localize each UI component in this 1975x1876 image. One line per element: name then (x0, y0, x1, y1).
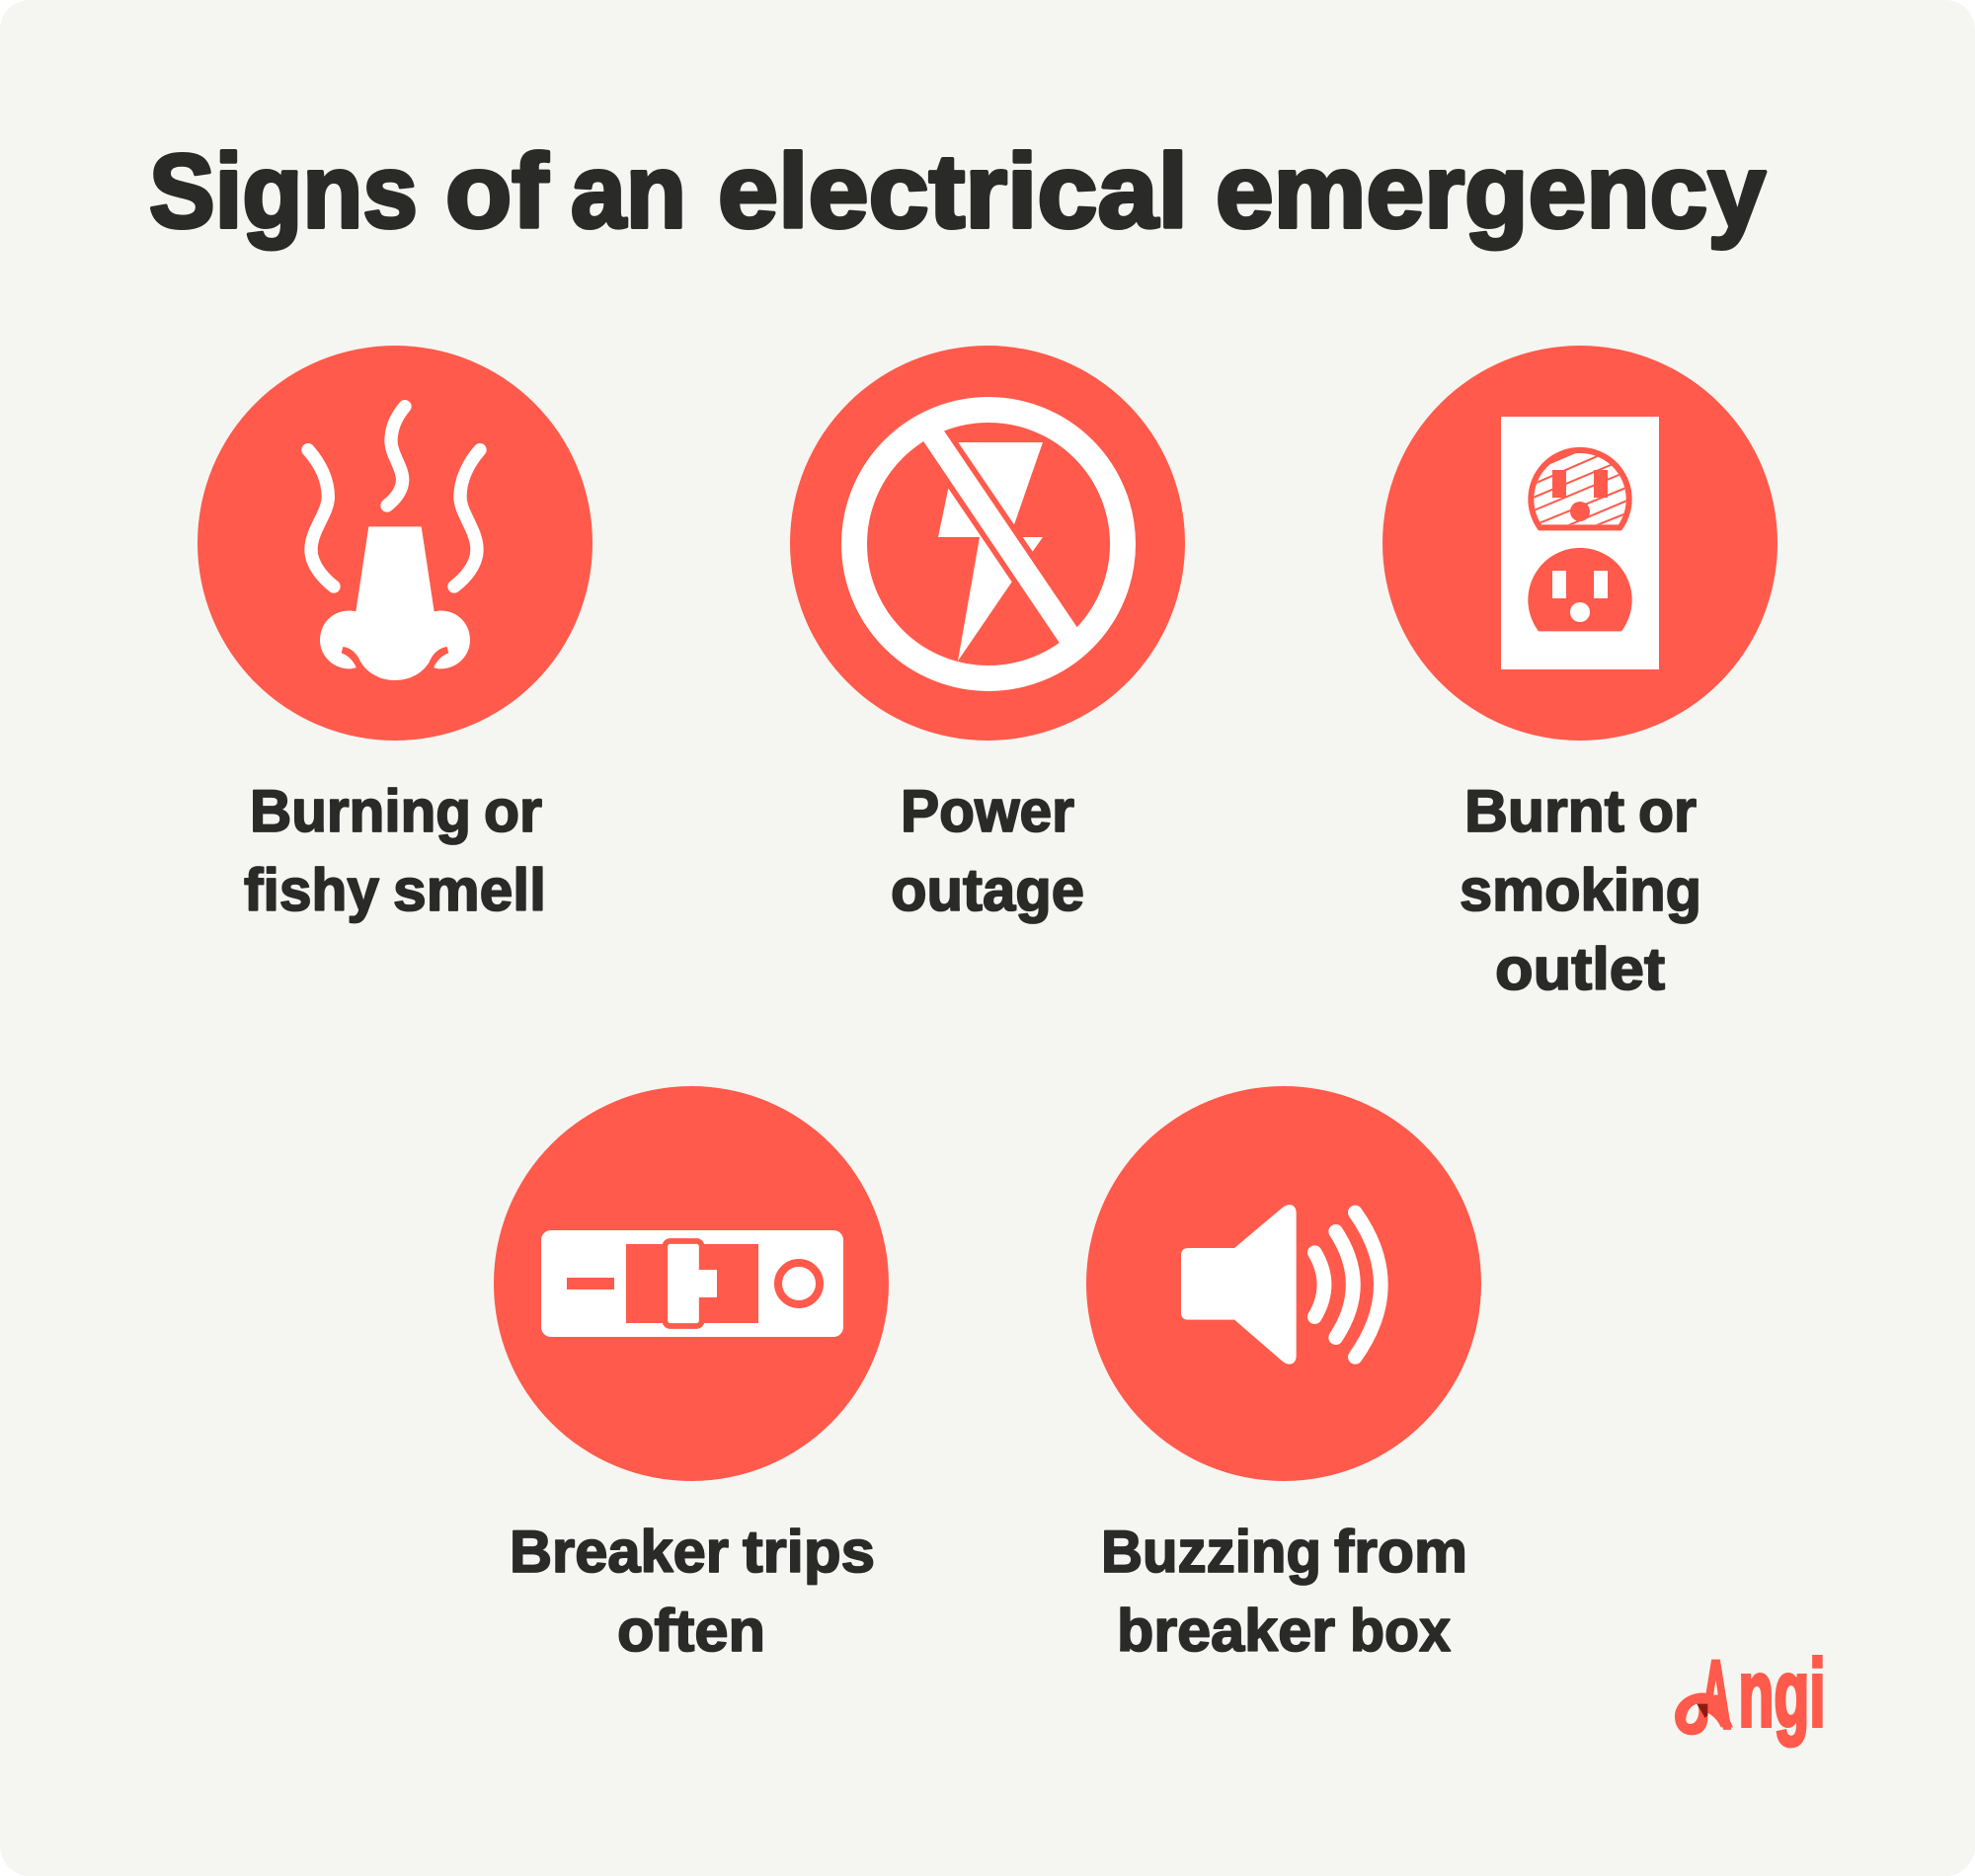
label: burning or fishy smell: smell (393, 857, 546, 923)
label: buzzing from breaker box: from (1334, 1519, 1467, 1585)
label: burning or fishy smell: fishy (244, 857, 380, 923)
label: burnt or smoking outlet: Burnt (1464, 778, 1624, 844)
label: burning or fishy smell: Burning (250, 778, 471, 844)
icon: circuit breaker switch (494, 1086, 889, 1481)
label: power outage (891, 778, 1084, 923)
label: burning or fishy smell: or (484, 778, 542, 844)
label: buzzing from breaker box: breaker (1117, 1598, 1335, 1664)
label: buzzing from breaker box (1101, 1519, 1467, 1664)
label: burnt or smoking outlet: outlet (1495, 936, 1665, 1002)
title: of (445, 133, 549, 250)
label: breaker trips often: often (617, 1598, 765, 1664)
logo: Angi (1675, 1640, 1826, 1748)
logo: Angi: ngi (1738, 1640, 1826, 1747)
icon: nose with smell wisps (198, 346, 592, 741)
panel: power outage (790, 346, 1185, 923)
label: power outage: outage (891, 857, 1084, 923)
icon: burnt wall outlet (1382, 346, 1778, 741)
label: breaker trips often: Breaker (510, 1519, 729, 1585)
label: burnt or smoking outlet: or (1638, 778, 1697, 844)
panel: buzzing from breaker box (1086, 1086, 1481, 1664)
label: buzzing from breaker box: box (1350, 1598, 1451, 1664)
label: buzzing from breaker box: Buzzing (1101, 1519, 1321, 1585)
panel: burning or fishy smell (198, 346, 592, 923)
panel: breaker trips often (494, 1086, 889, 1664)
icon: speaker with sound waves (1086, 1086, 1481, 1481)
icon: crossed-out lightning bolt (790, 346, 1185, 741)
label: burning or fishy smell (244, 778, 546, 923)
title: Signs (149, 133, 418, 250)
label: breaker trips often (510, 1519, 875, 1664)
label: burnt or smoking outlet (1460, 778, 1701, 1002)
title: emergency (1216, 133, 1766, 250)
label: burnt or smoking outlet: smoking (1460, 857, 1701, 923)
label: power outage: Power (901, 778, 1074, 844)
title (149, 133, 1766, 250)
label: breaker trips often: trips (743, 1519, 875, 1585)
title: an (571, 133, 686, 250)
title: electrical (718, 133, 1188, 250)
panel: burnt or smoking outlet (1382, 346, 1778, 1002)
logo: Angi: A (1700, 1641, 1731, 1748)
